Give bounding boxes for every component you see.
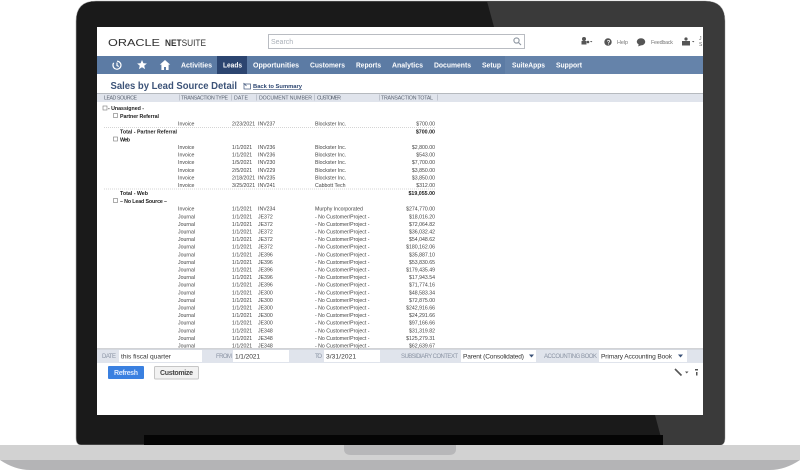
- table: transaction rows: 1/1/2021: [232, 214, 252, 220]
- table: transaction rows: - No Customer/Project -: [315, 306, 370, 312]
- table: transaction rows: Cabbott Tech: [315, 183, 346, 189]
- table: transaction rows: 1/1/2021: [232, 336, 252, 342]
- table: transaction rows: Invoice: [178, 145, 195, 151]
- table: transaction rows: $97,166.66: [409, 321, 435, 327]
- table: transaction rows: JE396: [258, 252, 273, 258]
- help label: Help: [617, 40, 628, 46]
- table: transaction rows: $18,016.20: [409, 214, 435, 220]
- table: transaction rows: 1/1/2021: [232, 328, 252, 334]
- table: transaction rows: - No Customer/Project -: [315, 214, 370, 220]
- table: transaction rows: JE300: [258, 313, 273, 319]
- table: transaction rows: Blockster Inc.: [315, 122, 346, 128]
- filter bar: SUBSIDIARY CONTEXT: [401, 354, 458, 360]
- table: transaction rows: - No Customer/Project -: [315, 283, 370, 289]
- table: transaction rows: - No Customer/Project -: [315, 222, 370, 228]
- table: transaction rows: 1/1/2021: [232, 260, 252, 266]
- search box: [268, 34, 524, 48]
- table: transaction rows: Journal: [178, 344, 195, 350]
- table: transaction rows: $36,032.42: [409, 230, 435, 236]
- table: transaction rows: 1/1/2021: [232, 237, 252, 243]
- table: transaction rows: JE348: [258, 336, 273, 342]
- table: transaction rows: $71,774.16: [409, 283, 435, 289]
- table: transaction rows: 2/18/2021: [232, 175, 255, 181]
- table header: TRANSACTION TYPE: [181, 96, 229, 102]
- screen: [97, 27, 703, 415]
- navigation labels: Reports: [356, 62, 381, 70]
- customize button: [154, 366, 198, 379]
- laptop lid and bezel: [76, 1, 725, 445]
- icon: feedback bubble: [637, 38, 645, 46]
- table: grouping rows: – No Lead Source –: [120, 199, 167, 205]
- navigation labels: Opportunities: [253, 62, 299, 70]
- table: transaction rows: $35,887.10: [409, 252, 435, 258]
- table: transaction rows: Journal: [178, 260, 195, 266]
- table: transaction rows: Journal: [178, 328, 195, 334]
- table: transaction rows: - No Customer/Project -: [315, 328, 370, 334]
- icon: people switch: [582, 37, 592, 44]
- table: transaction rows: INV236: [258, 145, 275, 151]
- icon: help: ?: [607, 40, 611, 46]
- table header: [97, 93, 703, 102]
- table: grouping rows: Total - Partner Referral: [120, 130, 178, 136]
- feedback label: Feedback: [651, 40, 673, 46]
- table header: CUSTOMER: [317, 96, 341, 102]
- table: transaction rows: JE396: [258, 260, 273, 266]
- top right utilities: [582, 36, 703, 48]
- navigation labels: Analytics: [392, 62, 423, 70]
- table header: DATE: [234, 96, 249, 102]
- table: transaction rows: Invoice: [178, 175, 195, 181]
- table: transaction rows: $3,850.00: [412, 175, 435, 181]
- oracle netsuite logo: NETSUITE: [165, 38, 206, 48]
- table: transaction rows: $179,435.49: [406, 268, 435, 274]
- filter bar: ACCOUNTING BOOK: [544, 354, 597, 360]
- table: transaction rows: $54,048.62: [409, 237, 435, 243]
- table: transaction rows: $72,064.82: [409, 222, 435, 228]
- table: transaction rows: - No Customer/Project -: [315, 245, 370, 251]
- table: transaction rows: - No Customer/Project -: [315, 290, 370, 296]
- refresh button: Refresh: [114, 370, 138, 377]
- table: transaction rows: - No Customer/Project -: [315, 230, 370, 236]
- table: transaction rows: - No Customer/Project -: [315, 313, 370, 319]
- table: grouping rows: $19,055.00: [408, 191, 435, 197]
- icon: home: [160, 60, 170, 70]
- table: transaction rows: $2,800.00: [412, 145, 435, 151]
- table: transaction rows: 3/25/2021: [232, 183, 255, 189]
- table: grouping rows: - Unassigned -: [108, 106, 144, 112]
- table: transaction rows: INV236: [258, 153, 275, 159]
- table: transaction rows: 2/23/2021: [232, 122, 255, 128]
- table header: LEAD SOURCE: [104, 96, 138, 102]
- icon: organisation: [682, 37, 694, 46]
- table: transaction rows: Invoice: [178, 207, 195, 213]
- table: transaction rows: 1/1/2021: [232, 207, 252, 213]
- filter bar: this fiscal quarter: [121, 354, 172, 360]
- table: transaction rows: Blockster Inc.: [315, 175, 346, 181]
- table: transaction rows: $17,943.54: [409, 275, 435, 281]
- laptop base: [0, 445, 800, 470]
- navigation labels: [181, 62, 583, 70]
- filter bar: [97, 348, 703, 363]
- table: transaction rows: 1/1/2021: [232, 290, 252, 296]
- table: transaction rows: Invoice: [178, 183, 195, 189]
- table: transaction rows: [178, 122, 435, 350]
- table header: DOCUMENT NUMBER: [259, 96, 312, 102]
- filter bar: FROM: [216, 354, 232, 360]
- table: transaction rows: JE372: [258, 230, 273, 236]
- customize button: Customize: [160, 370, 193, 377]
- table: transaction rows: $31,319.82: [409, 328, 435, 334]
- table: transaction rows: INV234: [258, 207, 275, 213]
- active tab: leads: [217, 56, 247, 74]
- table: transaction rows: 1/1/2021: [232, 344, 252, 350]
- oracle netsuite logo: ORACLE: [108, 37, 160, 49]
- table: transaction rows: $125,279.31: [406, 336, 435, 342]
- table: transaction rows: INV230: [258, 160, 275, 166]
- filter bar: Parent (Consolidated): [463, 354, 524, 360]
- table: transaction rows: JE348: [258, 344, 273, 350]
- table: transaction rows: 1/1/2021: [232, 145, 252, 151]
- table: transaction rows: Journal: [178, 306, 195, 312]
- table: transaction rows: 1/1/2021: [232, 275, 252, 281]
- table: transaction rows: $72,875.00: [409, 298, 435, 304]
- table: transaction rows: $274,770.00: [406, 207, 435, 213]
- table: transaction rows: Blockster Inc.: [315, 168, 346, 174]
- table: transaction rows: JE300: [258, 321, 273, 327]
- table: transaction rows: INV235: [258, 175, 275, 181]
- table: transaction rows: - No Customer/Project -: [315, 344, 370, 350]
- table: transaction rows: Invoice: [178, 168, 195, 174]
- table: transaction rows: Blockster Inc.: [315, 153, 346, 159]
- table: transaction rows: Blockster Inc.: [315, 160, 346, 166]
- navigation labels: Activities: [181, 62, 212, 70]
- table: transaction rows: 1/1/2021: [232, 321, 252, 327]
- icon: history: [113, 61, 121, 69]
- table: transaction rows: $543.00: [416, 153, 435, 159]
- table: grouping rows: $700.00: [416, 130, 435, 136]
- table: transaction rows: JE372: [258, 237, 273, 243]
- table: transaction rows: Journal: [178, 214, 195, 220]
- table: transaction rows: 1/1/2021: [232, 298, 252, 304]
- clipped account text: S: [699, 42, 703, 48]
- table: transaction rows: INV241: [258, 183, 275, 189]
- navigation labels: Setup: [482, 62, 501, 70]
- table: transaction rows: $3,850.00: [412, 168, 435, 174]
- table: transaction rows: Blockster Inc.: [315, 145, 346, 151]
- table: transaction rows: Journal: [178, 245, 195, 251]
- table header: TRANSACTION TOTAL: [381, 96, 433, 102]
- table: transaction rows: 1/1/2021: [232, 222, 252, 228]
- search box: Search: [271, 39, 293, 46]
- table: transaction rows: Invoice: [178, 160, 195, 166]
- table: transaction rows: 1/1/2021: [232, 230, 252, 236]
- navigation labels: Support: [556, 62, 583, 70]
- table: transaction rows: JE300: [258, 290, 273, 296]
- table: grouping rows: Total - Web: [120, 191, 149, 197]
- table: transaction rows: $180,162.06: [406, 245, 435, 251]
- table: transaction rows: 1/1/2021: [232, 313, 252, 319]
- table: transaction rows: JE396: [258, 275, 273, 281]
- table: transaction rows: $62,639.67: [409, 344, 435, 350]
- table: transaction rows: Journal: [178, 230, 195, 236]
- table: transaction rows: $242,916.66: [406, 306, 435, 312]
- navigation labels: Customers: [310, 62, 345, 70]
- table: transaction rows: - No Customer/Project -: [315, 252, 370, 258]
- table: grouping rows: Web: [120, 138, 131, 144]
- icon: star: [137, 60, 147, 69]
- report tool icons: [675, 369, 698, 376]
- table: transaction rows: 1/1/2021: [232, 306, 252, 312]
- navigation bar: [97, 56, 703, 74]
- table: transaction rows: 1/1/2021: [232, 252, 252, 258]
- table: transaction rows: Journal: [178, 268, 195, 274]
- table: transaction rows: JE396: [258, 283, 273, 289]
- filter bar: Primary Accounting Book: [601, 354, 673, 360]
- filter bar: DATE: [102, 354, 116, 360]
- tree toggles: [103, 106, 118, 202]
- table: transaction rows: JE300: [258, 298, 273, 304]
- table: transaction rows: $312.00: [416, 183, 435, 189]
- refresh button: [108, 366, 144, 379]
- table: transaction rows: JE396: [258, 268, 273, 274]
- table: transaction rows: Journal: [178, 298, 195, 304]
- table: transaction rows: $7,700.00: [412, 160, 435, 166]
- table: transaction rows: $53,830.65: [409, 260, 435, 266]
- table: transaction rows: Journal: [178, 222, 195, 228]
- filter bar: 3/31/2021: [326, 354, 356, 360]
- table: transaction rows: JE372: [258, 214, 273, 220]
- table: transaction rows: 1/1/2021: [232, 153, 252, 159]
- table: transaction rows: - No Customer/Project -: [315, 268, 370, 274]
- clipped account text: J: [699, 36, 702, 42]
- back to summary link: [244, 83, 303, 90]
- navigation labels: SuiteApps: [512, 62, 545, 70]
- table: transaction rows: - No Customer/Project -: [315, 237, 370, 243]
- table: transaction rows: JE300: [258, 306, 273, 312]
- table: transaction rows: 1/1/2021: [232, 245, 252, 251]
- table: transaction rows: JE372: [258, 222, 273, 228]
- table: transaction rows: Journal: [178, 313, 195, 319]
- navigation labels: Leads: [223, 62, 242, 70]
- table: transaction rows: 1/1/2021: [232, 268, 252, 274]
- table: transaction rows: $700.00: [416, 122, 435, 128]
- table: transaction rows: Journal: [178, 237, 195, 243]
- table: transaction rows: - No Customer/Project -: [315, 336, 370, 342]
- filter bar: 1/1/2021: [235, 354, 260, 360]
- icon: back arrow: [244, 83, 250, 89]
- report title: Sales by Lead Source Detail: [110, 81, 237, 92]
- table: transaction rows: Journal: [178, 290, 195, 296]
- filter bar: TO: [315, 354, 322, 360]
- table: transaction rows: JE348: [258, 328, 273, 334]
- base notch: [344, 445, 456, 455]
- table: transaction rows: 2/5/2021: [232, 168, 252, 174]
- table: transaction rows: Journal: [178, 275, 195, 281]
- table: transaction rows: INV229: [258, 168, 275, 174]
- table: transaction rows: Journal: [178, 321, 195, 327]
- table: transaction rows: JE372: [258, 245, 273, 251]
- table: transaction rows: INV237: [258, 122, 275, 128]
- oracle netsuite logo: [108, 37, 206, 49]
- table: transaction rows: - No Customer/Project -: [315, 260, 370, 266]
- table: grouping rows: Partner Referral: [120, 114, 160, 120]
- back to summary link: Back to Summary: [253, 84, 303, 90]
- table: transaction rows: Invoice: [178, 122, 195, 128]
- table: transaction rows: Murphy Incorporated: [315, 207, 363, 213]
- icon: magnifier: [514, 38, 521, 45]
- navigation labels: Documents: [434, 62, 471, 70]
- table: transaction rows: - No Customer/Project -: [315, 321, 370, 327]
- table: grouping rows: [103, 106, 436, 205]
- table: transaction rows: - No Customer/Project -: [315, 275, 370, 281]
- table: transaction rows: Journal: [178, 252, 195, 258]
- table: transaction rows: 1/1/2021: [232, 283, 252, 289]
- table: transaction rows: $24,291.66: [409, 313, 435, 319]
- table: transaction rows: $48,583.34: [409, 290, 435, 296]
- table: transaction rows: Invoice: [178, 153, 195, 159]
- table: transaction rows: 1/5/2021: [232, 160, 252, 166]
- table: transaction rows: - No Customer/Project -: [315, 298, 370, 304]
- table: transaction rows: Journal: [178, 283, 195, 289]
- table: transaction rows: Journal: [178, 336, 195, 342]
